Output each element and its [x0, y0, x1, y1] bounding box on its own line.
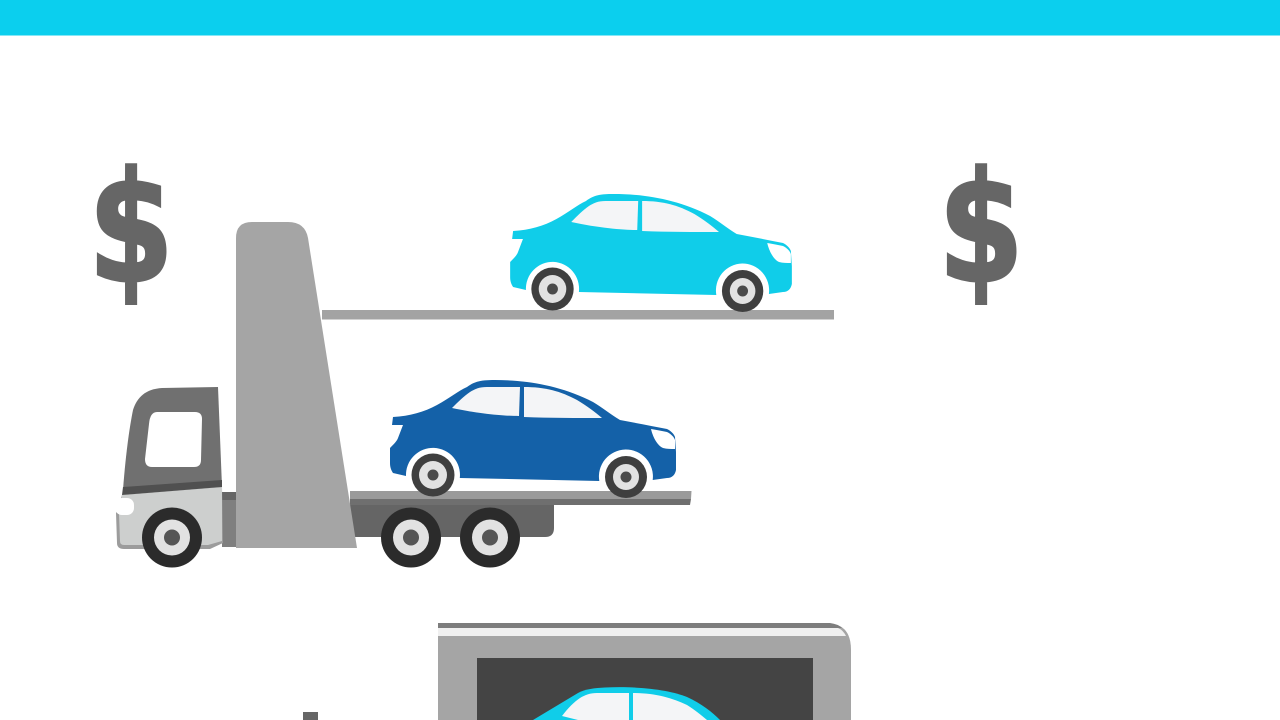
- blue car body: [390, 380, 676, 481]
- monitor highlight: [438, 628, 846, 636]
- blue car front window: [524, 387, 602, 418]
- cab window: [145, 412, 202, 467]
- headlight: [115, 498, 134, 515]
- screen car front window: [633, 693, 707, 720]
- cyan car rear wheel: [531, 268, 574, 310]
- blue car front wheel: [605, 456, 647, 498]
- blue car headlight: [651, 429, 675, 449]
- cyan car: [510, 194, 792, 312]
- car carrier truck: [115, 222, 834, 568]
- front wheel: [142, 508, 202, 568]
- rear wheel one: [381, 508, 441, 568]
- cyan car headlight: [767, 243, 791, 263]
- cyan car body: [510, 194, 792, 295]
- monitor: [438, 623, 851, 720]
- car on screen: [533, 687, 720, 720]
- chassis: [350, 503, 554, 537]
- cab stripe: [122, 480, 222, 495]
- cab: [115, 387, 223, 549]
- lower deck: [350, 491, 692, 505]
- screen car roof: [533, 687, 720, 720]
- blue car rear window: [452, 387, 520, 416]
- rear connector: [222, 492, 238, 547]
- upper deck: [322, 310, 834, 320]
- cab lower body: [116, 487, 223, 549]
- rear wheel two: [460, 508, 520, 568]
- cyan car front wheel: [722, 270, 763, 312]
- monitor frame: [438, 624, 851, 720]
- icon: left dollar sign: $: [88, 139, 174, 317]
- cab upper body: [123, 387, 222, 490]
- partial dollar sign at bottom: [303, 712, 318, 720]
- cyan car rear window: [571, 201, 638, 230]
- screen car rear window: [562, 693, 629, 720]
- top banner: [0, 0, 1280, 36]
- blue car: [390, 380, 676, 498]
- blue car rear wheel: [412, 454, 454, 496]
- icon: right dollar sign: $: [938, 139, 1024, 317]
- cab lower panel: [119, 487, 222, 545]
- tower: [236, 222, 357, 548]
- monitor screen: [477, 658, 813, 720]
- cyan car front window: [642, 201, 719, 232]
- monitor top edge: [438, 623, 842, 628]
